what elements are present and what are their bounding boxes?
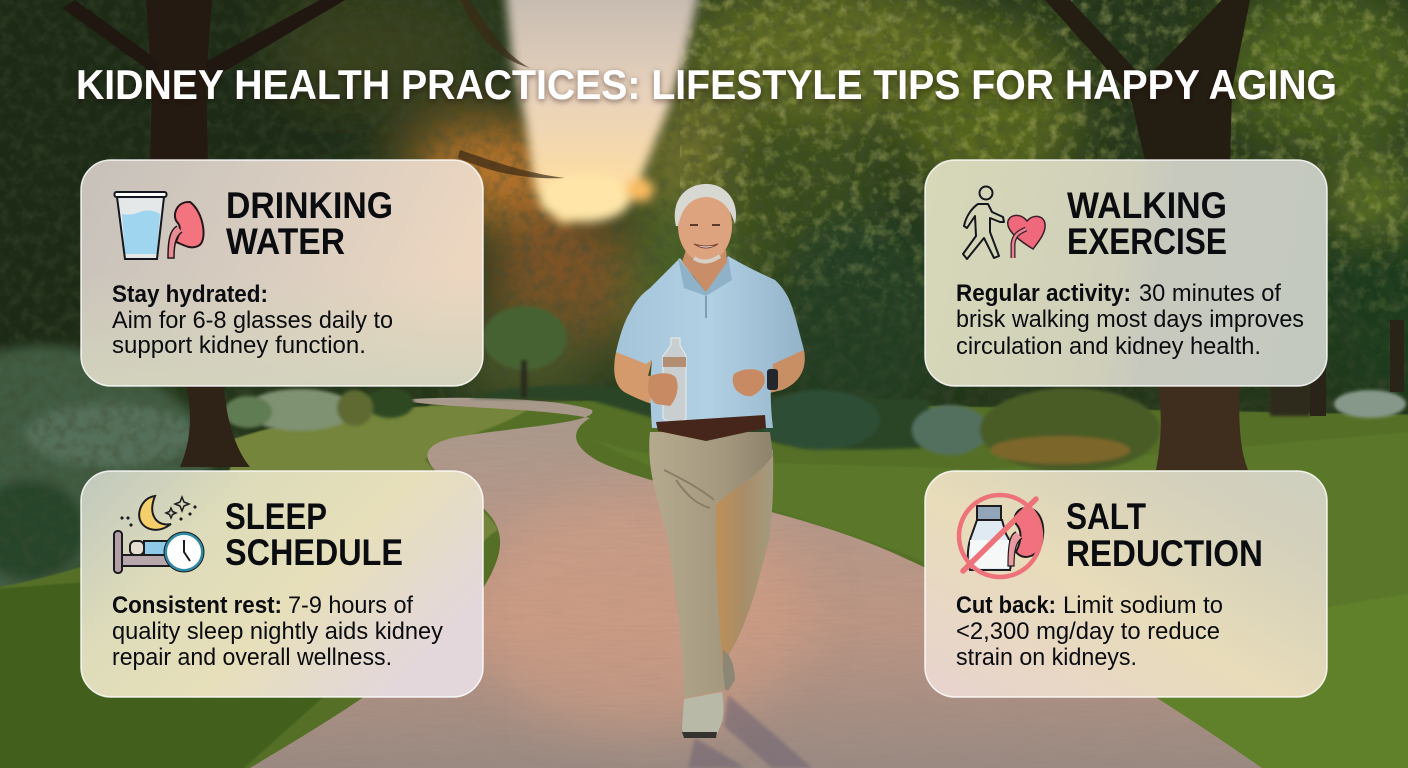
road grain <box>250 400 1270 768</box>
left shrubs <box>0 345 214 600</box>
neck <box>682 250 727 292</box>
heading: sleep schedule <box>225 496 403 573</box>
text: sodium tip: Limit sodium to <box>1063 592 1223 619</box>
heading: drinking water <box>226 185 393 262</box>
belt <box>656 415 766 441</box>
text: activity tip: 30 minutes of <box>1139 280 1281 307</box>
heading: salt reduction: SALT <box>1066 496 1146 537</box>
ground <box>0 400 1408 768</box>
heading: walking exercise <box>1067 185 1227 262</box>
text: activity tip: brisk walking most days improves <box>956 306 1304 333</box>
text: activity tip: circulation and kidney health. <box>956 333 1261 360</box>
text: sodium tip: <2,300 mg/day to reduce <box>956 618 1220 645</box>
heading: drinking water: WATER <box>226 221 345 262</box>
tree trunks <box>62 0 1404 470</box>
icon: glass of water and kidney <box>114 192 204 259</box>
left arm <box>614 352 684 407</box>
heading: drinking water: DRINKING <box>226 185 393 226</box>
text: activity tip: Regular activity: <box>956 280 1131 307</box>
heading: walking exercise: EXERCISE <box>1067 221 1227 262</box>
heading: sleep schedule: SLEEP <box>225 496 327 537</box>
text: rest tip: repair and overall wellness. <box>112 644 392 671</box>
back leg <box>700 450 773 690</box>
right arm <box>732 350 805 398</box>
icon: walker and heart <box>963 186 1045 259</box>
icon: crossed-out salt shaker and kidney <box>959 495 1043 577</box>
text: hydration tip: Stay hydrated: <box>112 281 268 308</box>
hair <box>675 184 736 226</box>
water bottle <box>663 338 686 422</box>
head <box>678 190 732 262</box>
panel background <box>925 471 1327 697</box>
front shoe <box>682 692 724 738</box>
heading: salt reduction: REDUCTION <box>1066 533 1263 574</box>
panel background <box>81 471 483 697</box>
sky glow <box>505 0 700 224</box>
text: hydration tip: Aim for 6-8 glasses daily to <box>112 307 393 334</box>
winding path <box>250 398 1262 768</box>
watch <box>767 369 778 390</box>
text: hydration tip: support kidney function. <box>112 332 366 359</box>
text: sodium tip <box>956 592 1223 671</box>
distant tree line and bushes <box>224 306 1406 472</box>
panel: drinking water <box>81 160 483 386</box>
polo shirt <box>616 256 804 428</box>
icon: moon, bed and clock <box>114 496 204 573</box>
panel: walking exercise <box>925 160 1327 386</box>
hands <box>648 369 765 406</box>
central figure: smiling older man walking with water bottle <box>614 184 812 768</box>
panel: sleep schedule <box>81 471 483 697</box>
title: KIDNEY HEALTH PRACTICES: LIFESTYLE TIPS FOR HAPPY AGING <box>76 61 1337 108</box>
text: rest tip: Consistent rest: <box>112 592 282 619</box>
heading: salt reduction <box>1066 496 1263 574</box>
panel background <box>925 160 1327 386</box>
text: activity tip <box>956 280 1304 360</box>
panel background <box>81 160 483 386</box>
text: rest tip: 7-9 hours of <box>288 592 413 619</box>
text: sodium tip: Cut back: <box>956 592 1056 619</box>
text: sodium tip: strain on kidneys. <box>956 644 1137 671</box>
text: rest tip: quality sleep nightly aids kidney <box>112 618 443 645</box>
heading: walking exercise: WALKING <box>1067 185 1227 226</box>
text: rest tip <box>112 592 443 671</box>
smile and eyes <box>694 244 718 248</box>
heading: sleep schedule: SCHEDULE <box>225 532 403 573</box>
panel: salt reduction <box>925 471 1327 697</box>
ground shadows <box>688 695 812 768</box>
front leg <box>649 432 773 698</box>
text: hydration tip <box>112 281 393 359</box>
sunlit leaf texture <box>680 0 1408 360</box>
back shoe <box>723 650 735 691</box>
foliage masses <box>0 0 1408 430</box>
